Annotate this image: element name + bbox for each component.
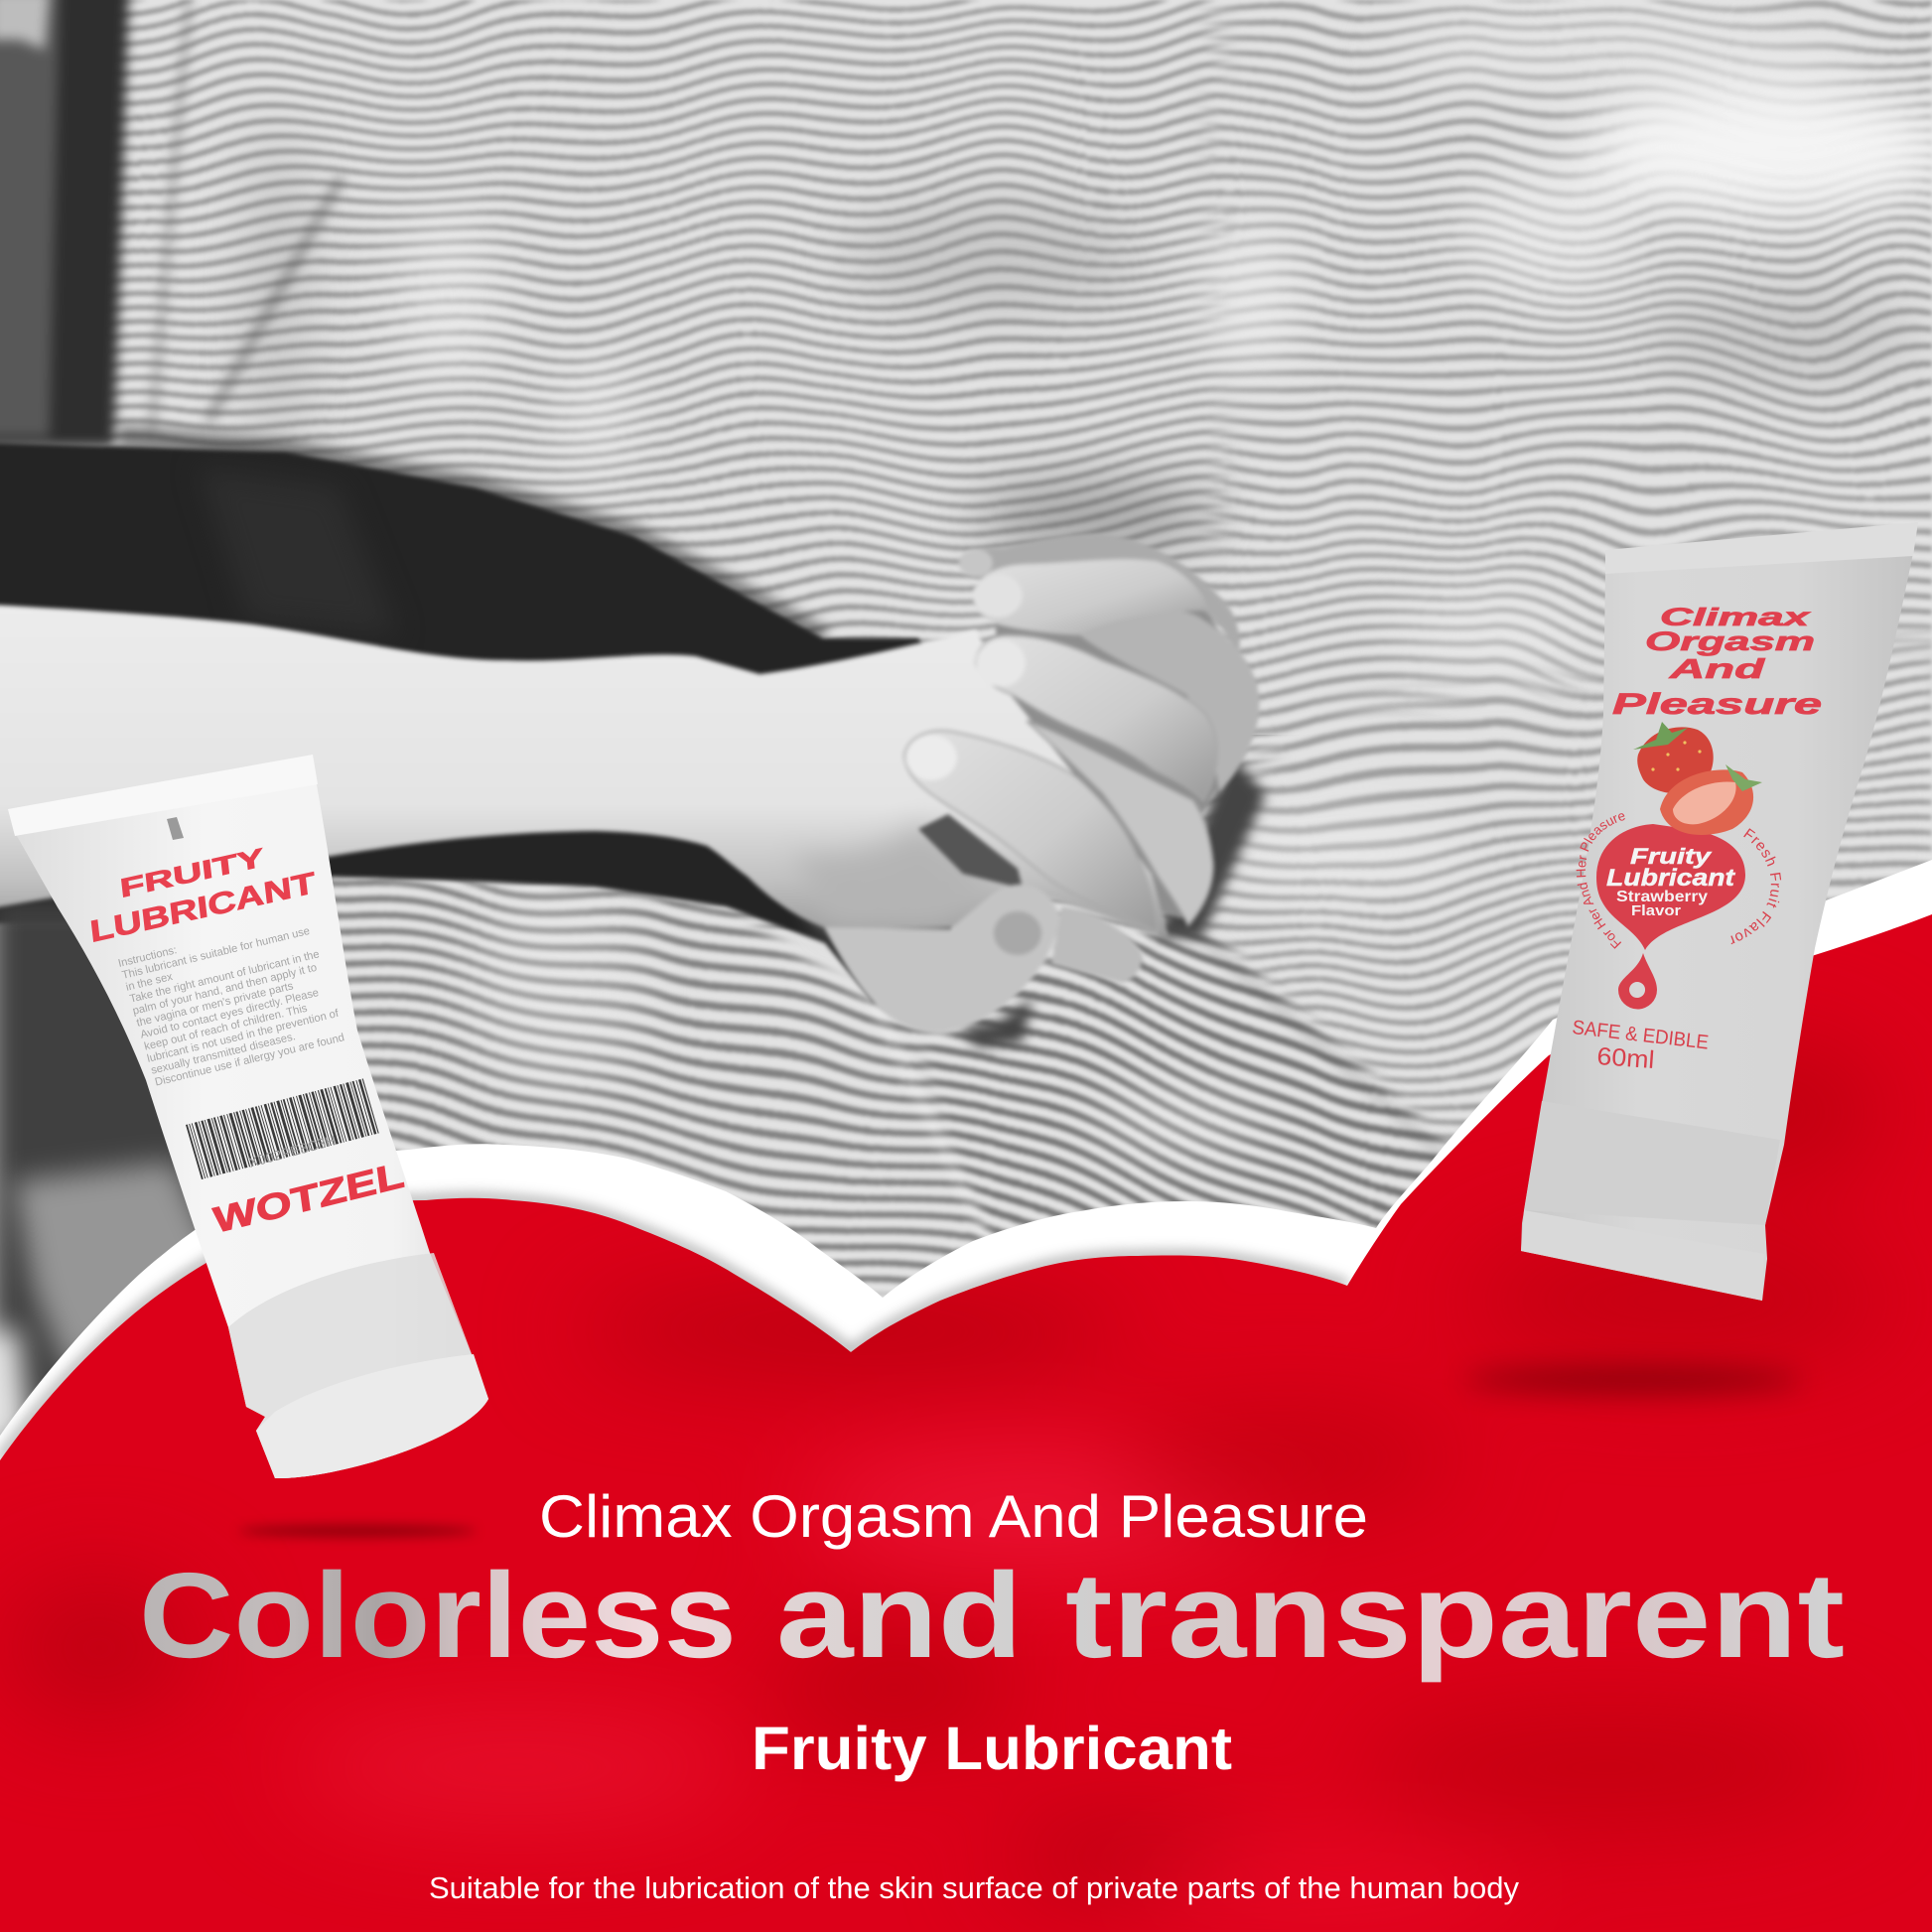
dark column at left edge: [0, 0, 129, 447]
shadow under right tube: [1464, 1368, 1802, 1392]
safe and edible text: SAFE & EDIBLE: [1571, 1017, 1710, 1054]
cap rim: [1521, 1210, 1764, 1301]
instructions text: keep out of reach of children. This: [143, 1003, 309, 1053]
front finger: [904, 731, 1158, 933]
product name: Fruity Lubricant: [752, 1715, 1232, 1782]
red panel: [0, 894, 1932, 1932]
fabric highlights and shading: [119, 0, 1932, 1251]
instructions text: Discontinue use if allergy you are found: [154, 1032, 345, 1089]
instructions text: sexually transmitted diseases.: [150, 1031, 297, 1077]
dark pillow behind the arm: [0, 443, 953, 1003]
label heading: FRUITY: [118, 842, 265, 903]
arm and clasped hands: [0, 533, 1260, 1033]
badge text: Fruity: [1630, 844, 1713, 869]
headline: and: [776, 1548, 1023, 1683]
label heading: And: [1668, 653, 1766, 684]
instructions text: This lubricant is suitable for human use: [121, 925, 311, 982]
tube body: [1521, 553, 1913, 1301]
cap rim: [256, 1354, 488, 1478]
striped fabric: diagonal fold: [918, 927, 1449, 1238]
slit mark: [167, 817, 184, 840]
volume text: 60ml: [1596, 1042, 1655, 1074]
badge text: Lubricant: [1606, 865, 1735, 892]
thumb: [824, 885, 1060, 1033]
grey blanket lower left: [0, 898, 268, 1489]
soft shadow along the red edge: [0, 1198, 1347, 1460]
collar: [228, 1253, 488, 1478]
label heading: Pleasure: [1612, 688, 1822, 721]
label heading: LUBRICANT: [88, 867, 318, 949]
striped fabric: lower pillow: [332, 876, 987, 1297]
collar: [1524, 1101, 1780, 1225]
instructions text: Instructions:: [117, 944, 178, 970]
arm and back of the hand: [0, 605, 1169, 938]
product tube: front label: [1521, 525, 1917, 1301]
striped fabric: upper left pillow: [99, 0, 1330, 933]
lower finger: [1051, 906, 1143, 983]
badge flavor text: Flavor: [1631, 902, 1681, 919]
cut strawberry: [1660, 764, 1762, 835]
finger nails: [905, 549, 1041, 955]
instructions text: the vagina or men's private parts: [135, 980, 295, 1030]
instructions text: palm of your hand, and then apply it to: [131, 962, 318, 1018]
headline: [139, 1548, 1845, 1683]
crimp seal: [1605, 522, 1918, 574]
heart shaped badge: [1596, 824, 1745, 950]
badge flavor text: Strawberry: [1616, 889, 1708, 905]
shaded underlay between the fingers: [993, 586, 1246, 918]
instructions text: Avoid to contact eyes directly. Please: [139, 987, 320, 1041]
drop icon: [1618, 953, 1657, 1009]
barcode number: X002PE8C3H: [247, 1132, 338, 1171]
finger with top nail: [976, 635, 1217, 800]
dark gap between fingers: [918, 814, 1023, 889]
instructions text: in the sex: [125, 971, 174, 994]
barcode: [194, 1106, 372, 1152]
tube body: [13, 779, 488, 1478]
instructions text: [117, 910, 346, 1090]
label heading: Orgasm: [1645, 626, 1815, 656]
badge text: [1606, 844, 1735, 892]
shading on the hand: [794, 824, 993, 929]
product tube: back label: [8, 755, 488, 1478]
crimp seal: [8, 755, 318, 836]
brand name: WOTZEL: [211, 1154, 406, 1241]
instructions text: lubricant is not used in the prevention of: [146, 1008, 341, 1065]
white curved band: [0, 860, 1932, 1932]
finger behind, top: [960, 533, 1240, 655]
whole strawberry: [1633, 722, 1714, 793]
instructions text: Take the right amount of lubricant in the: [129, 948, 321, 1006]
badge flavor text: [1616, 889, 1708, 919]
usage note: Suitable for the lubrication of the skin surface of private parts of the human body: [429, 1870, 1519, 1905]
shadows around the hands: [958, 755, 1266, 1047]
curved text left: For Her And Her Pleasure: [1577, 813, 1625, 949]
striped fabric: upper right pillow: [1172, 0, 1932, 735]
knuckle finger, back: [1077, 610, 1260, 792]
striped fabric: right of hands: [1207, 625, 1932, 1141]
label heading: [88, 842, 318, 949]
label heading: [1612, 604, 1822, 721]
subtitle: Climax Orgasm And Pleasure: [539, 1483, 1368, 1550]
right finger: [1027, 721, 1213, 925]
curved text right: Fresh Fruit Flavor: [1730, 828, 1781, 945]
shadow under left tube: [238, 1525, 477, 1537]
headline: transparent: [1065, 1548, 1845, 1683]
label heading: Climax: [1660, 604, 1811, 631]
second finger: [973, 559, 1208, 635]
headline: Colorless: [139, 1548, 737, 1683]
